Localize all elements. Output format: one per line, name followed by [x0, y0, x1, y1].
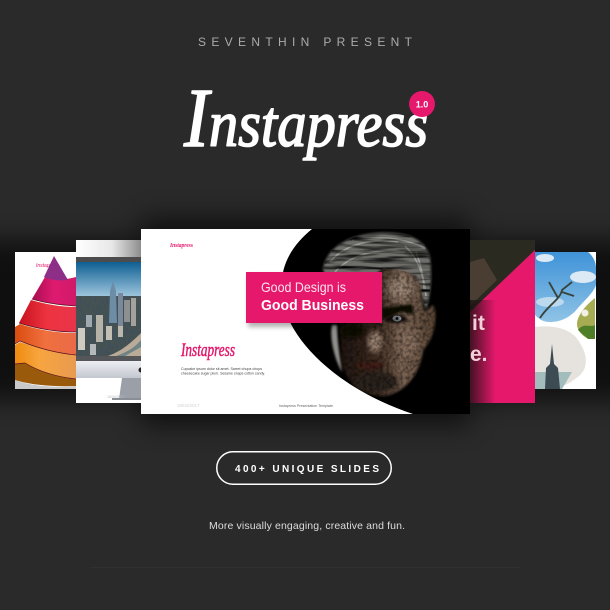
- slide: pyramid chart: Instapress: [36, 263, 60, 269]
- portrait: nose: [368, 331, 382, 353]
- slide footer: Instapress Presentation Template: [279, 403, 334, 408]
- portrait: stubble chin: [354, 372, 398, 392]
- slide body text: [181, 367, 265, 376]
- portrait: mouth: [357, 362, 386, 368]
- portrait: shadowed eye socket: [339, 324, 365, 338]
- title card shadow: [248, 275, 382, 327]
- slide wordmark: Instapress: [180, 340, 235, 361]
- heading: seventhin present: SEVENTHIN PRESENT: [198, 35, 413, 49]
- pink title card: Good Design is: [261, 279, 346, 295]
- slide date: 18/04/2017: [177, 403, 200, 408]
- portrait: cheek highlight: [398, 328, 418, 358]
- pink title card: Good Business: [261, 297, 364, 314]
- portrait: brow shadow: [382, 304, 414, 320]
- slide body text: Cupcake ipsum dolor sit amet. Sweet chupa chups: [181, 367, 262, 371]
- footer rule: [90, 567, 520, 568]
- portrait: skin texture: [340, 270, 435, 396]
- button: 400+ unique slides: [217, 452, 391, 484]
- portrait: hair: [323, 233, 431, 310]
- logo: Instapress wordmark with version badge: Instapress: [183, 72, 428, 165]
- slide: rounded photo collage: [535, 252, 596, 389]
- logo: Instapress wordmark with version badge: 1.0: [416, 100, 428, 110]
- slide body text: cheesecake sugar plum. Sesame snaps cotton candy.: [181, 372, 265, 376]
- slide: main good design panel: [141, 229, 470, 414]
- portrait: hair strands: [330, 238, 426, 296]
- portrait: forehead highlight: [386, 277, 414, 299]
- slide: pyramid chart: [15, 252, 76, 389]
- slide: desktop monitor cityscape: 18/04/2017: [107, 395, 125, 399]
- portrait: hair texture: [323, 233, 431, 310]
- slide: pink diagonal with dark photo: [470, 240, 535, 403]
- small brand mark: Instapress: [169, 242, 193, 249]
- drop shadow behind slides: [0, 218, 610, 425]
- tagline: More visually engaging, creative and fun.: [209, 520, 405, 532]
- portrait: eye: [385, 315, 407, 323]
- button: 400+ unique slides: 400+ UNIQUE SLIDES: [235, 464, 379, 475]
- pink title card: [246, 272, 382, 323]
- portrait: face: [340, 270, 435, 396]
- slide: pink diagonal with dark photo: it: [472, 312, 485, 335]
- black curved photo panel with portrait: [270, 229, 470, 414]
- portrait: side hair streak: [331, 325, 342, 372]
- slide: desktop monitor cityscape: [76, 240, 144, 403]
- slide: pink diagonal with dark photo: e.: [470, 343, 488, 366]
